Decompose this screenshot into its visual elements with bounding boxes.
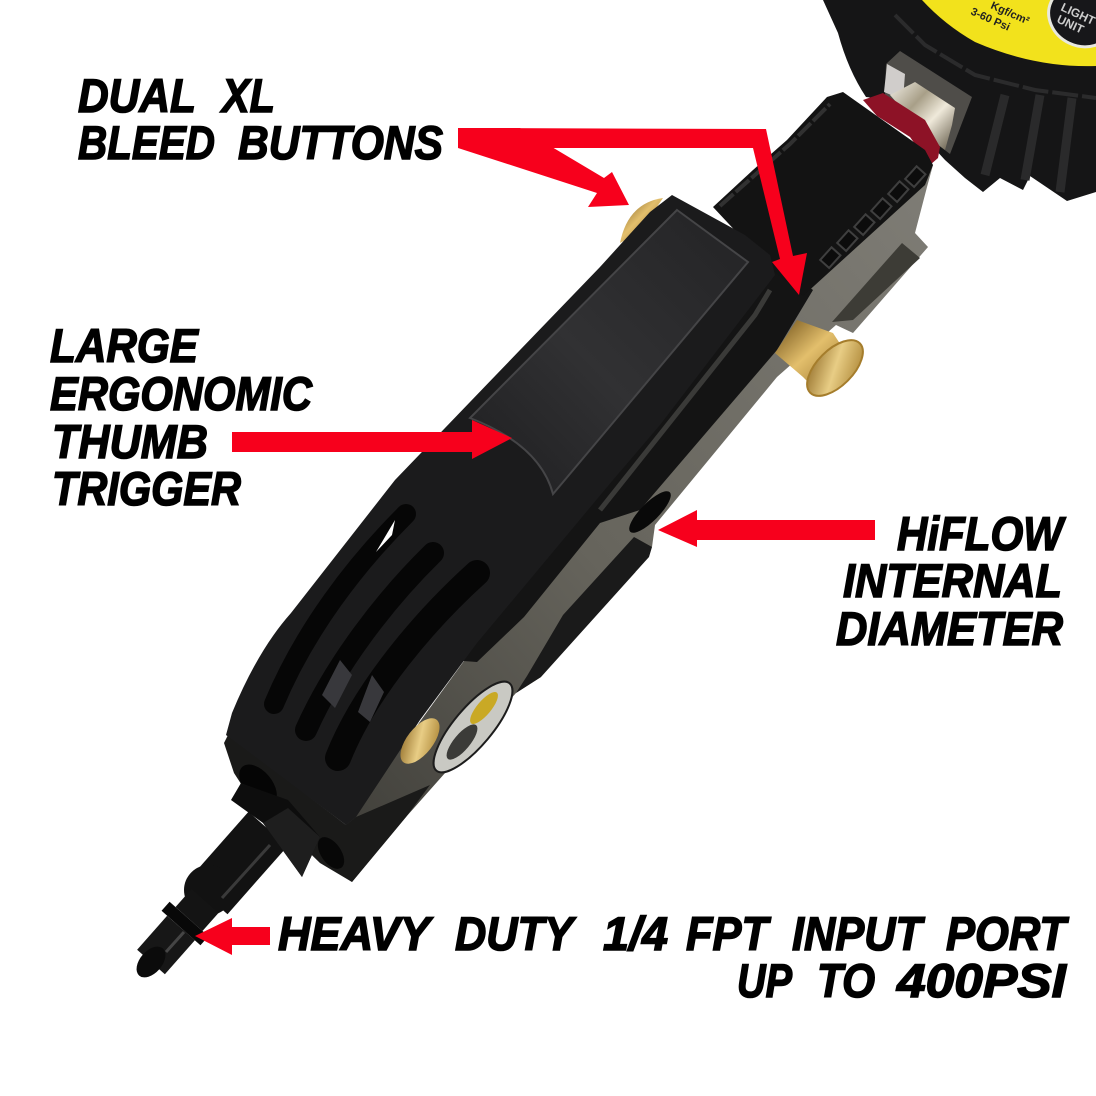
logo medallion xyxy=(422,671,524,783)
callout: heavy duty input port: UP xyxy=(737,954,793,1007)
arrow: hiflow diameter xyxy=(658,510,875,547)
dark lower lobe xyxy=(516,537,652,693)
gauge yellow face: Kgf/cm² xyxy=(989,0,1031,28)
callout: hiflow internal diameter: HiFLOW xyxy=(897,507,1066,560)
callout: heavy duty input port: PORT xyxy=(946,907,1070,960)
callout: heavy duty input port: TO xyxy=(817,954,875,1007)
callout: dual xl bleed buttons: BLEED xyxy=(78,116,215,169)
product photo: air inflator gun xyxy=(131,0,1096,983)
callout: heavy duty input port: DUTY xyxy=(455,907,576,960)
gauge silver fitting xyxy=(884,51,972,154)
callout: heavy duty input port xyxy=(278,907,1070,1007)
air plug nozzle xyxy=(131,783,320,983)
callout: heavy duty input port: HEAVY xyxy=(278,907,433,960)
hiflow oval opening xyxy=(624,486,676,538)
arrow: input port xyxy=(195,918,270,955)
lower port holes xyxy=(232,758,284,812)
callout: dual xl bleed buttons: XL xyxy=(219,69,275,122)
callout: dual xl bleed buttons: BUTTONS xyxy=(238,116,443,169)
trigger slots xyxy=(274,514,477,758)
callout: large ergonomic thumb trigger: ERGONOMIC xyxy=(50,367,313,420)
callout: large ergonomic thumb trigger xyxy=(50,319,313,515)
callout: hiflow internal diameter: INTERNAL xyxy=(843,554,1062,607)
callout: heavy duty input port: INPUT xyxy=(792,907,926,960)
grey lower body xyxy=(320,165,933,882)
channel grey ridge xyxy=(600,290,770,510)
grey fin window xyxy=(832,243,920,322)
callout: heavy duty input port: FPT xyxy=(686,907,772,960)
gauge rubber housing xyxy=(823,0,1096,201)
thumb trigger xyxy=(226,195,775,825)
brass bleed button (rear) xyxy=(620,198,663,243)
callout: large ergonomic thumb trigger: LARGE xyxy=(50,319,199,372)
callout: heavy duty input port: 400PSI xyxy=(896,954,1067,1007)
brass rivet xyxy=(393,712,447,770)
dark nose case xyxy=(224,735,430,882)
callout: hiflow internal diameter xyxy=(836,507,1066,655)
callout: large ergonomic thumb trigger: TRIGGER xyxy=(52,462,241,515)
arrow: thumb trigger xyxy=(232,420,512,459)
callout: dual xl bleed buttons: DUAL xyxy=(78,69,196,122)
callout: dual xl bleed buttons xyxy=(78,69,443,169)
gauge yellow face: 3-60 Psi xyxy=(969,6,1012,34)
arrow: dual bleed buttons xyxy=(458,128,807,295)
dark channel xyxy=(450,262,813,662)
red collar xyxy=(863,93,940,165)
callout: hiflow internal diameter: DIAMETER xyxy=(836,602,1063,655)
callout: large ergonomic thumb trigger: THUMB xyxy=(52,415,208,468)
upper black block with teeth xyxy=(713,92,933,296)
gauge yellow face xyxy=(922,0,1096,66)
brass bleed button (front) xyxy=(775,320,872,405)
callout: heavy duty input port: 1/4 xyxy=(603,907,668,960)
gauge yellow face: UNIT xyxy=(1055,12,1087,37)
